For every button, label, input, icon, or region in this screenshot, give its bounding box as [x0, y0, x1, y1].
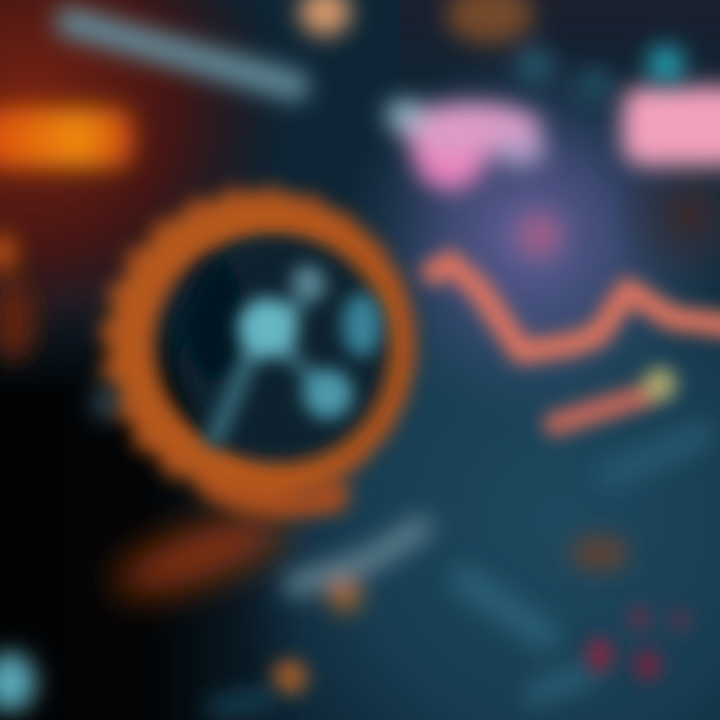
orange bar, top left [0, 108, 134, 168]
top blobs [299, 0, 613, 101]
trend bar with marker [555, 367, 677, 424]
gear ring [106, 193, 410, 608]
small orange marks, left edge [0, 234, 36, 362]
bottom streak [93, 384, 420, 610]
pink panel, top centre [385, 99, 562, 257]
red dashes, bottom right [586, 604, 690, 681]
bottom left cyan blob [0, 652, 36, 712]
gear centre [177, 238, 389, 462]
bottom orange dot [272, 659, 308, 695]
line chart [425, 262, 720, 352]
cyan marker, top right [648, 46, 684, 82]
network icon in gear centre [212, 265, 382, 445]
table rows, bottom right [215, 435, 700, 708]
pink panel, top right [622, 86, 720, 166]
streak: top heading [70, 22, 295, 86]
